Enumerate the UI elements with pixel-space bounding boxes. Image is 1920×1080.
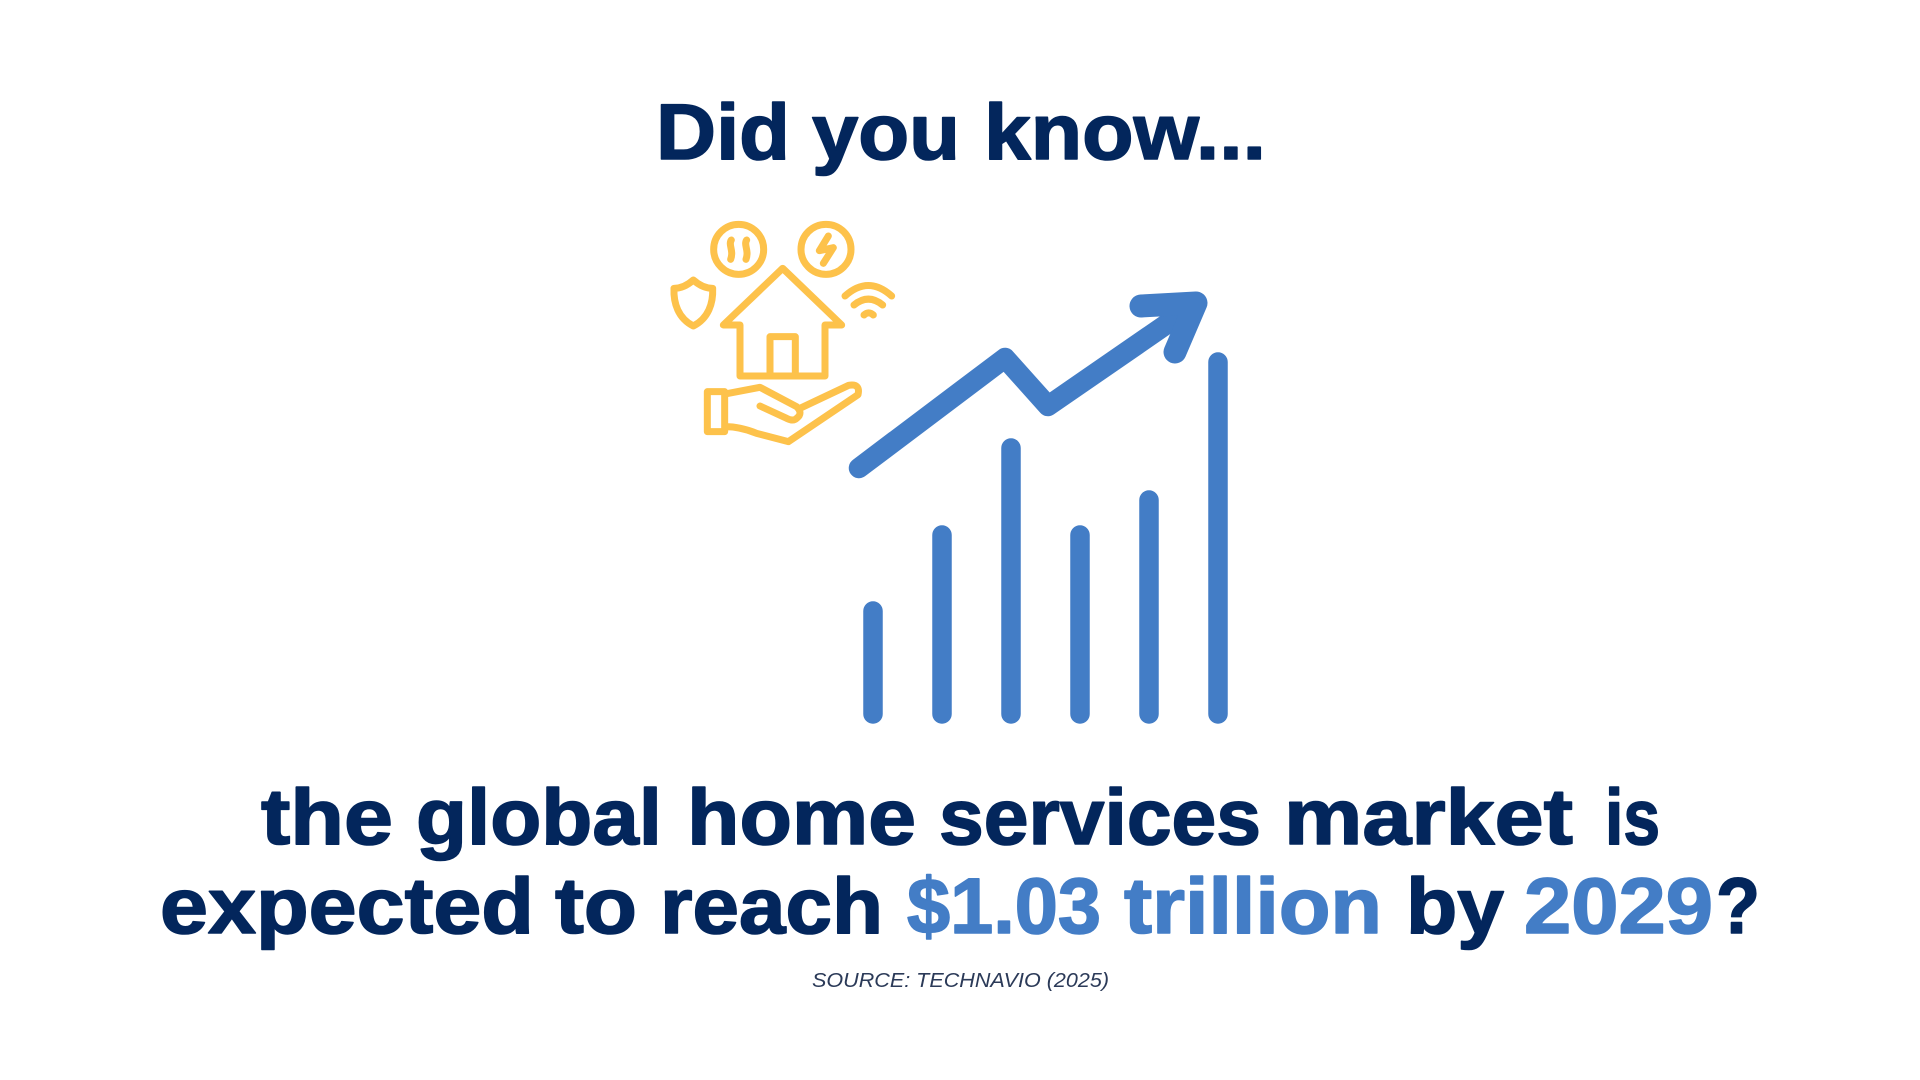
title: you <box>812 87 960 176</box>
title: know... <box>984 87 1266 176</box>
title: Did <box>656 87 790 176</box>
statement line 2: expected <box>160 861 534 950</box>
statement line 2: by <box>1406 861 1504 950</box>
icon: wifi <box>845 285 892 315</box>
statement line 2: reach <box>660 861 883 950</box>
trend arrow <box>859 303 1196 468</box>
statement line 2: trillion <box>1124 861 1382 950</box>
statement line 1: global <box>416 772 662 861</box>
source note: SOURCE: TECHNAVIO (2025) <box>812 970 1109 992</box>
icon: electricity coin <box>801 224 851 274</box>
statement line 1: market <box>1284 772 1573 861</box>
statement line 2: $1.03 <box>907 861 1101 950</box>
statement line 1: is <box>1605 772 1660 861</box>
statement line 1: the <box>261 772 393 861</box>
statement line 2: ? <box>1716 861 1760 950</box>
bar chart <box>873 362 1218 714</box>
statement line 2: to <box>555 861 637 950</box>
statement <box>160 772 1760 950</box>
icon: home services <box>674 224 892 442</box>
icon: house <box>723 268 842 376</box>
icon: heat coin <box>714 224 764 274</box>
statement line 1: services <box>939 772 1261 861</box>
statement line 1: home <box>687 772 916 861</box>
statement line 2: 2029 <box>1524 861 1713 950</box>
icon: hand <box>707 385 858 442</box>
icon: shield <box>674 280 713 326</box>
